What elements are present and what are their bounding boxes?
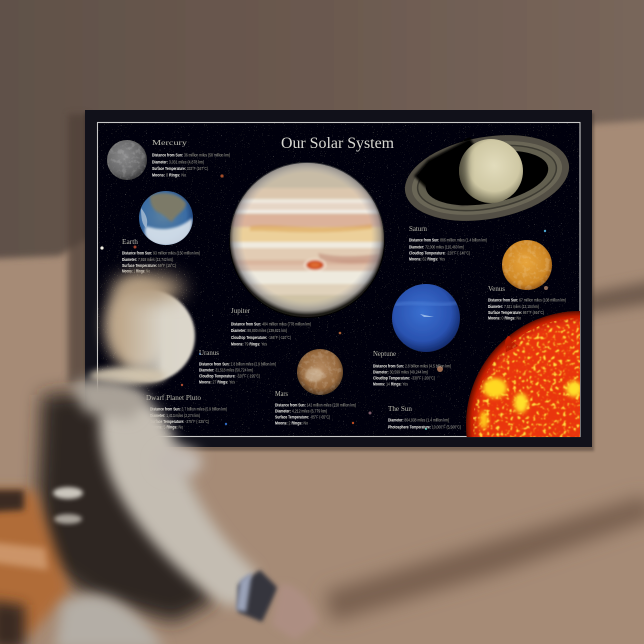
text: Jupiter: Cloudtop Temperature: -166°F (-110°C): [231, 335, 291, 340]
text: The Sun: Photosphere Temperature: 10,000°F (5,500°C): [388, 424, 461, 430]
text: Dwarf Planet Pluto: Moons: 5 Rings: No: [150, 424, 183, 430]
text: Neptune: Distance from Sun: 2.8 billion miles (4.5 billion km): [373, 364, 451, 368]
text: Neptune: Cloudtop Temperature: -330°F (-200°C): [373, 376, 435, 380]
text: Dwarf Planet Pluto: Diameter: 1,413 miles (2,274 km): [150, 413, 200, 418]
text: Dwarf Planet Pluto: [146, 393, 227, 430]
text: Earth: Moons: 1 Rings: No: [122, 268, 150, 274]
text: Neptune: Neptune: [373, 349, 397, 358]
text: Saturn: Distance from Sun: 886 million miles (1.4 billion km): [409, 238, 487, 242]
text: Earth: Diameter: 7,918 miles (12,742 km): [122, 257, 173, 262]
text: Dwarf Planet Pluto: Distance from Sun: 3.7 billion miles (5.9 billion km): [150, 406, 227, 412]
planet: Neptune: [392, 284, 460, 352]
planet: Mars: [297, 349, 343, 395]
border: [98, 122, 580, 436]
text: Venus: Distance from Sun: 67 million miles (108 million km): [488, 298, 566, 302]
poster shadow: [84, 113, 594, 451]
text: Saturn: Saturn: [409, 224, 427, 233]
planet: Uranus (blurred behind astronaut): [90, 274, 195, 385]
starfield: [97, 122, 580, 437]
text: Mercury: Moons: 0 Rings: No: [152, 172, 186, 178]
text: Mercury: Surface Temperature: 333°F (167°C): [152, 166, 208, 171]
text: Mars: Moons: 2 Rings: No: [275, 420, 308, 426]
planet: Earth: [139, 191, 193, 246]
text: Jupiter: Moons: 79 Rings: Yes: [231, 342, 268, 346]
text: Dwarf Planet Pluto: Surface Temperature: -375°F (-225°C): [150, 419, 209, 424]
text: Saturn: [409, 224, 487, 262]
text: Mars: Diameter: 4,212 miles (6,779 km): [275, 408, 327, 414]
text: Uranus: Moons: 27 Rings: Yes: [199, 380, 236, 384]
planet: Mercury: [107, 140, 147, 180]
text: The Sun: [388, 404, 461, 430]
text: Earth: [122, 237, 200, 274]
text: Neptune: [373, 349, 451, 386]
text: Uranus: Distance from Sun: 1.8 billion miles (2.9 billion km): [199, 362, 276, 366]
planet: Jupiter: [225, 160, 390, 318]
poster: [85, 110, 592, 447]
text: Earth: Surface Temperature: 59°F (15°C): [122, 263, 176, 268]
text: Jupiter: Distance from Sun: 484 million miles (778 million km): [231, 322, 311, 326]
text: Saturn: Diameter: 72,000 miles (116,460 km): [409, 244, 464, 250]
text: Mars: Distance from Sun: 142 million miles (228 million km): [275, 402, 356, 408]
text: Mercury: [152, 138, 230, 178]
text: Dwarf Planet Pluto: Dwarf Planet Pluto: [146, 393, 201, 402]
text: Earth: Distance from Sun: 93 million miles (150 million km): [122, 250, 200, 256]
text: Mercury: Diameter: 3,031 miles (4,878 km): [152, 160, 204, 164]
text: Venus: Surface Temperature: 867°F (464°C): [488, 310, 544, 315]
planet: Saturn: [404, 135, 570, 221]
text: Uranus: Diameter: 31,518 miles (50,724 km): [199, 368, 253, 372]
text: Mars: Mars: [275, 389, 288, 398]
text: Earth: Earth: [122, 237, 138, 246]
text: The Sun: The Sun: [388, 404, 412, 413]
text: Venus: Moons: 0 Rings: No: [488, 316, 521, 320]
text: Saturn: Moons: 62 Rings: Yes: [409, 256, 446, 262]
text: Jupiter: Diameter: 88,800 miles (139,821 km): [231, 328, 287, 333]
text: Uranus: [199, 348, 276, 384]
text: Mercury: Distance from Sun: 36 million miles (58 million km): [152, 152, 230, 158]
astronaut (blurred foreground): [0, 379, 318, 644]
text: Mercury: Mercury: [152, 138, 187, 147]
text: Neptune: Moons: 14 Rings: Yes: [373, 382, 409, 386]
title: Our Solar System: [281, 135, 394, 152]
text: Uranus: Cloudtop Temperature: -320°F (-195°C): [199, 374, 260, 378]
text: Jupiter: [231, 306, 311, 346]
text: Mars: [275, 389, 356, 426]
text: Venus: [488, 284, 566, 320]
text: Uranus: Uranus: [199, 348, 219, 357]
planet: The Sun: [466, 311, 580, 437]
text: Venus: Venus: [488, 284, 505, 293]
text: Saturn: Cloudtop Temperature: -220°F (-140°C): [409, 250, 470, 256]
planet: Venus: [502, 240, 552, 290]
text: Venus: Diameter: 7,521 miles (12,104 km): [488, 304, 539, 309]
text: The Sun: Diameter: 864,938 miles (1.4 million km): [388, 418, 449, 422]
text: Mars: Surface Temperature: -85°F (-65°C): [275, 414, 330, 420]
text: Neptune: Diameter: 30,599 miles (49,244 km): [373, 370, 428, 374]
text: Jupiter: Jupiter: [231, 306, 250, 315]
